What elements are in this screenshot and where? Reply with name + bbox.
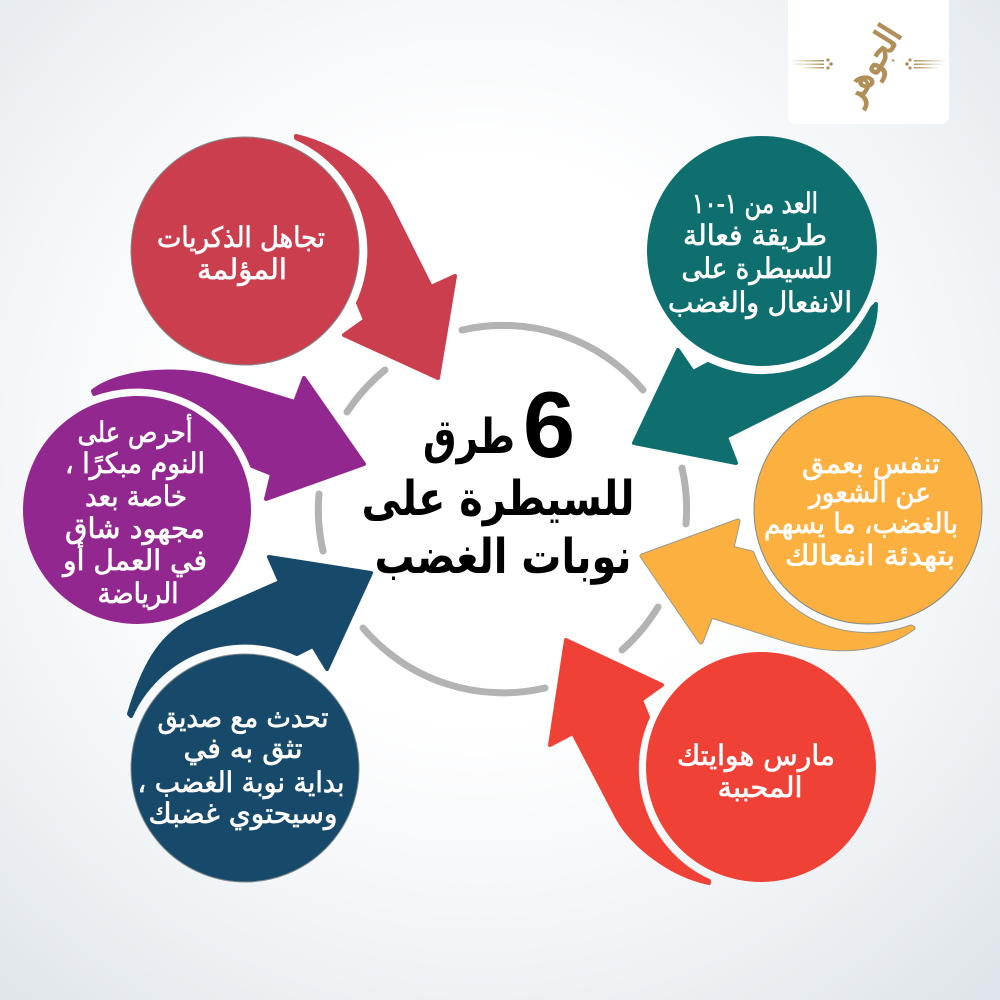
title: [362, 372, 634, 585]
arrow: crimson: [296, 136, 455, 378]
text: breathe deeply: بتهدئة انفعالك: [785, 539, 955, 572]
panel: talk to a friend: [129, 557, 371, 882]
text: ignore painful memories: تجاهل الذكريات: [157, 221, 325, 254]
text: talk to a friend: تثق به في: [184, 732, 302, 765]
text: sleep early: الرياضة: [98, 577, 178, 610]
circle: navy: [131, 654, 359, 882]
text: breathe deeply: [764, 447, 958, 572]
arrow: teal: [634, 304, 876, 463]
text: practice hobbies: [677, 739, 835, 804]
panel: breathe deeply: [642, 396, 982, 649]
text: sleep early: أحرص على: [78, 413, 192, 449]
title line 3: نوبات الغضب: [374, 529, 632, 585]
text: sleep early: مجهود شاق: [65, 512, 205, 545]
text: practice hobbies: المحببة: [718, 771, 802, 804]
title line 1: طرق: [423, 409, 515, 465]
logo ornament dots right: [905, 58, 912, 70]
arrow: purple: [93, 371, 364, 499]
panel: sleep early: [23, 371, 364, 624]
text: talk to a friend: وسيحتوي غضبك: [148, 797, 338, 830]
logo ornament right: [914, 60, 947, 68]
circle: yellow: [754, 396, 982, 624]
text: ignore painful memories: [157, 221, 325, 286]
arrow: yellow: [642, 521, 913, 649]
text: count from 1 to 10: الانفعال والغضب: [668, 286, 852, 319]
circle: teal: [647, 136, 877, 366]
text: breathe deeply: بالغضب، ما يسهم: [764, 507, 958, 540]
text: sleep early: في العمل أو: [61, 541, 207, 577]
panel: ignore painful memories: [131, 136, 455, 378]
circle: crimson: [131, 137, 359, 365]
text: talk to a friend: تحدث مع صديق: [158, 701, 328, 734]
text: count from 1 to 10: العد من ١-١٠: [692, 187, 818, 220]
arrow: navy: [129, 557, 371, 716]
text: count from 1 to 10: للسيطرة على: [682, 252, 832, 285]
text: talk to a friend: بداية نوبة الغضب ،: [138, 766, 344, 799]
text: sleep early: خاصة بعد: [85, 480, 187, 513]
text: sleep early: [61, 413, 207, 610]
text: talk to a friend: [138, 701, 344, 830]
text: breathe deeply: تنفس بعمق: [802, 447, 940, 480]
logo card: [788, 0, 949, 124]
logo ornament dots left: [826, 58, 833, 70]
text: sleep early: النوم مبكرًا ،: [65, 447, 205, 480]
arrow: red: [550, 640, 709, 883]
title line 2: للسيطرة على: [362, 471, 634, 527]
panel: practice hobbies: [550, 640, 876, 883]
text: practice hobbies: مارس هوايتك: [677, 739, 835, 772]
title number: 6: [523, 372, 575, 477]
circle: purple: [23, 396, 251, 624]
text: breathe deeply: عن الشعور: [807, 476, 931, 509]
text: count from 1 to 10: طريقة فعالة: [683, 219, 827, 252]
circle: red: [646, 652, 876, 882]
panel: count from 1 to 10: [634, 136, 877, 463]
logo ornament left: [790, 60, 824, 68]
text: ignore painful memories: المؤلمة: [197, 253, 287, 286]
text: count from 1 to 10: [668, 187, 852, 319]
